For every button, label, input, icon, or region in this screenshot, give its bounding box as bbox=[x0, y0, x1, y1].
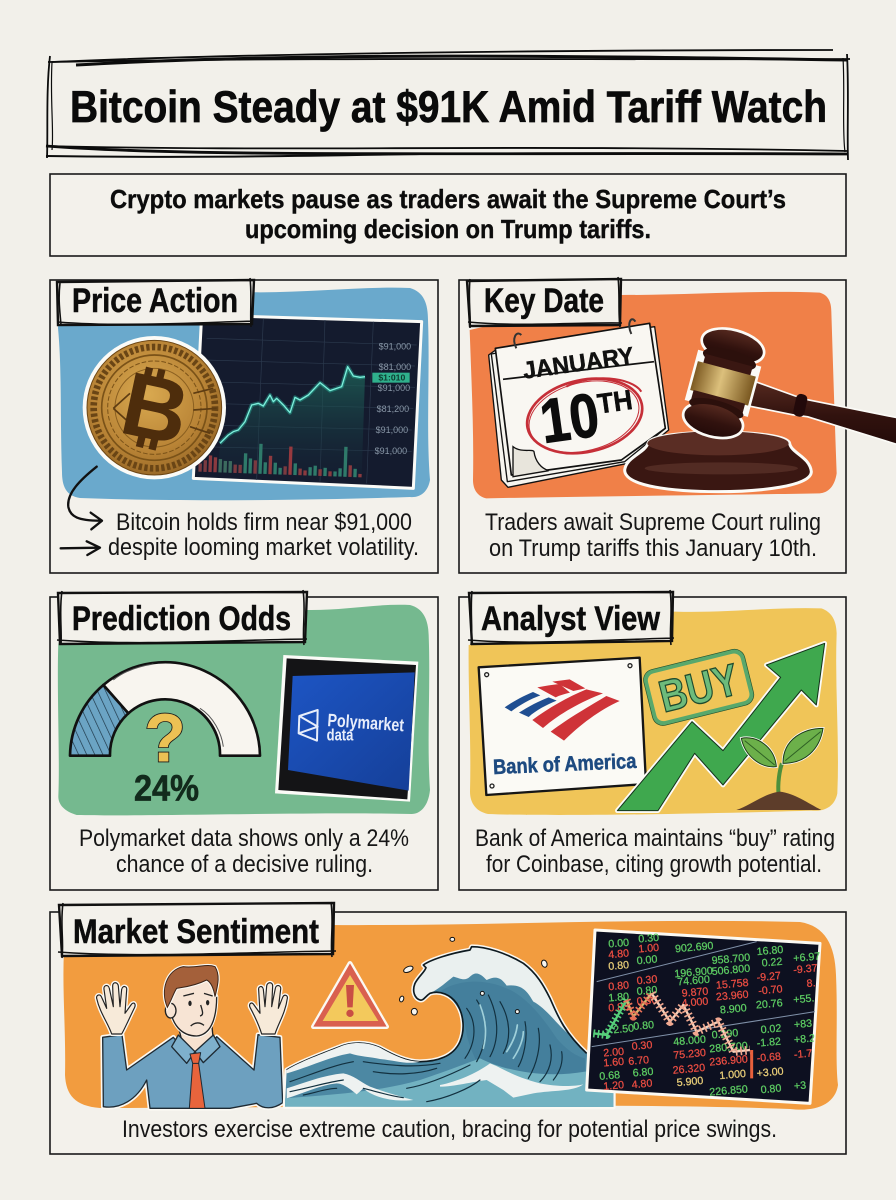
polymarket logo bbox=[299, 710, 318, 741]
heading tab: analyst view: Analyst View bbox=[481, 600, 660, 638]
ticker numbers: 2.50 bbox=[613, 1022, 635, 1036]
investor right hand bbox=[250, 983, 287, 1034]
orange backdrop bbox=[63, 921, 838, 1110]
ticker numbers: 1.60 bbox=[603, 1056, 625, 1070]
ticker numbers: 8.900 bbox=[720, 1002, 747, 1016]
icon: bitcoin coin: B bbox=[113, 354, 197, 465]
ticker numbers: 0.80 bbox=[608, 1001, 630, 1015]
heading tab: analyst view bbox=[468, 590, 674, 645]
ticker numbers: 280.700 bbox=[709, 1040, 748, 1055]
heading tab: price action bbox=[57, 278, 254, 327]
investor shirt bbox=[103, 1035, 283, 1108]
ticker numbers: 75.230 bbox=[673, 1047, 706, 1062]
caption: key date: Traders await Supreme Court ruling bbox=[485, 509, 821, 536]
caption: prediction odds: chance of a decisive ruling. bbox=[116, 851, 373, 878]
ticker numbers: 0.80 bbox=[760, 1082, 782, 1096]
caption: price action bbox=[108, 509, 419, 561]
heading tab: prediction odds bbox=[57, 590, 307, 645]
rising arrow bbox=[617, 643, 825, 811]
ticker numbers: 226.850 bbox=[709, 1083, 748, 1099]
panel: analyst view bbox=[459, 590, 846, 890]
caption: price action: Bitcoin holds firm near $91,000 bbox=[116, 509, 412, 536]
ticker numbers: 2.00 bbox=[603, 1046, 625, 1060]
ticker numbers: -9.37 bbox=[793, 962, 818, 976]
panel: market sentiment bbox=[50, 902, 846, 1154]
investor tie bbox=[189, 1053, 205, 1108]
subtitle box bbox=[50, 174, 846, 256]
prediction artwork bbox=[58, 605, 430, 815]
ticker numbers: 23.960 bbox=[716, 989, 749, 1003]
ticker numbers: -0.68 bbox=[756, 1051, 782, 1065]
ticker numbers: 5.900 bbox=[676, 1075, 704, 1089]
ticker numbers: 0.00 bbox=[636, 953, 658, 967]
ticker numbers: 236.900 bbox=[709, 1053, 748, 1069]
ticker numbers: -0.70 bbox=[758, 983, 783, 997]
wave inner dark face bbox=[440, 982, 585, 1082]
arrow: lower caption arrow bbox=[61, 541, 100, 555]
ticker numbers: 20.76 bbox=[756, 997, 783, 1011]
ticker numbers: 0.80 bbox=[608, 979, 630, 993]
price axis labels: $1:010 bbox=[378, 373, 405, 383]
ticker numbers: 16.80 bbox=[756, 944, 784, 958]
ticker numbers: +83 bbox=[794, 1018, 813, 1031]
price axis labels: $91,000 bbox=[375, 446, 407, 456]
heading tab: key date: Key Date bbox=[484, 282, 604, 320]
ticker numbers: 0.30 bbox=[631, 1039, 653, 1053]
panel frame bbox=[50, 597, 438, 890]
chart area fill bbox=[218, 367, 365, 477]
candlestick trend bbox=[593, 993, 752, 1078]
wave crest outline bbox=[287, 947, 587, 1070]
gavel handle bbox=[748, 382, 896, 443]
caption: prediction odds bbox=[79, 825, 409, 878]
ticker numbers: 0.30 bbox=[636, 973, 658, 987]
panel: price action bbox=[50, 278, 438, 573]
ticker numbers: 6.70 bbox=[628, 1054, 650, 1068]
caption: price action: despite looming market volatility. bbox=[108, 534, 419, 561]
bank name: Bank of America bbox=[493, 750, 637, 779]
ticker numbers: 1.20 bbox=[603, 1079, 625, 1093]
heading tab: key date bbox=[467, 277, 622, 328]
ticker numbers: 4.80 bbox=[631, 1077, 653, 1091]
ticker numbers: 0.22 bbox=[761, 956, 783, 970]
stock ticker screen bbox=[587, 930, 821, 1103]
wave water streaks bbox=[290, 995, 562, 1102]
price axis labels bbox=[372, 341, 411, 456]
wave light base bbox=[285, 1058, 613, 1107]
gavel sound block bbox=[625, 431, 811, 492]
investor head bbox=[169, 980, 217, 1036]
price chart and coin artwork bbox=[61, 315, 422, 555]
price axis labels: $91,000 bbox=[376, 425, 408, 435]
ticker numbers: 9.870 bbox=[681, 986, 709, 1000]
investor face bbox=[183, 993, 213, 1026]
caption: analyst view: Bank of America maintains “buy” rating bbox=[475, 825, 835, 852]
icon: gavel bbox=[625, 324, 896, 492]
ticker numbers: 1.00 bbox=[638, 942, 660, 956]
gauge value: 24% bbox=[134, 768, 199, 809]
heading tab: market sentiment bbox=[58, 902, 336, 958]
caption: analyst view: for Coinbase, citing growth potential. bbox=[486, 851, 822, 878]
ticker numbers: 48.000 bbox=[673, 1034, 706, 1048]
ticker numbers: 4.80 bbox=[608, 947, 630, 961]
seedling bbox=[736, 728, 823, 810]
analyst artwork bbox=[469, 608, 838, 815]
wave body bbox=[285, 947, 613, 1107]
ticker numbers: 0.02 bbox=[760, 1022, 782, 1036]
ticker numbers: 0.30 bbox=[636, 994, 658, 1008]
caption: analyst view bbox=[475, 825, 835, 878]
subtitle line one: Crypto markets pause as traders await the Supreme Court’s bbox=[110, 184, 786, 214]
ticker numbers: 958.700 bbox=[711, 952, 751, 967]
subtitle line two: upcoming decision on Trump tariffs. bbox=[245, 214, 651, 244]
laptop photo bbox=[275, 655, 418, 802]
icon: worried investor bbox=[97, 965, 287, 1108]
ticker numbers: 4.000 bbox=[681, 996, 709, 1010]
volume bars bbox=[198, 442, 363, 477]
caption: market sentiment: Investors exercise extreme caution, bracing for potential price swings. bbox=[122, 1116, 777, 1143]
caption: key date bbox=[485, 509, 821, 562]
ticker numbers bbox=[599, 932, 821, 1099]
ticker numbers: 74.600 bbox=[677, 974, 710, 988]
ticker numbers: 506.800 bbox=[711, 963, 751, 978]
middle foam band bbox=[287, 1073, 413, 1101]
icon: tidal wave bbox=[285, 937, 613, 1107]
heading tab: prediction odds: Prediction Odds bbox=[72, 600, 291, 638]
price axis labels: $91,000 bbox=[378, 383, 410, 393]
price axis labels: $81,000 bbox=[379, 362, 411, 372]
arrow: upper caption arrow bbox=[68, 467, 102, 529]
ticker numbers: 15.758 bbox=[716, 977, 749, 992]
caption: key date: on Trump tariffs this January 10th. bbox=[489, 535, 817, 562]
ticker numbers: -1.82 bbox=[756, 1036, 782, 1050]
buy stamp: BUY bbox=[654, 655, 744, 722]
gauge remaining segment bbox=[103, 662, 260, 756]
calendar month: JANUARY bbox=[521, 342, 636, 385]
gavel head bbox=[680, 324, 766, 443]
ticker divider lines bbox=[592, 942, 815, 1047]
blue backdrop bbox=[58, 288, 430, 500]
investor collar bbox=[172, 1035, 220, 1063]
green backdrop bbox=[58, 605, 430, 815]
ticker numbers: 0.30 bbox=[638, 932, 660, 946]
gauge 24 percent segment bbox=[70, 685, 128, 756]
laptop screen sublabel: data bbox=[327, 726, 354, 745]
ticker numbers: +8.2 bbox=[794, 1032, 816, 1046]
icon: calendar bbox=[489, 319, 669, 487]
ticker numbers: 8. bbox=[806, 977, 816, 990]
ticker numbers: 196.900 bbox=[674, 965, 713, 980]
ticker numbers: 6.80 bbox=[632, 1066, 654, 1080]
wave droplets bbox=[399, 937, 548, 1015]
ticker numbers: 0.00 bbox=[608, 937, 630, 951]
sentiment artwork left bbox=[97, 963, 387, 1108]
price axis labels: $91,000 bbox=[379, 341, 411, 351]
gavel silhouette bbox=[680, 324, 766, 443]
wave highlights bbox=[480, 1005, 523, 1058]
investor hair bbox=[164, 965, 218, 1007]
ticker numbers: 0.68 bbox=[599, 1069, 621, 1083]
ticker numbers: 26.320 bbox=[672, 1062, 706, 1077]
title sketch frame bbox=[46, 50, 850, 160]
key date artwork bbox=[470, 292, 896, 498]
calendar header line bbox=[503, 362, 654, 379]
calendar day: 10 bbox=[536, 381, 603, 457]
laptop screen label: Polymarket bbox=[327, 710, 405, 735]
ticker numbers: 902.690 bbox=[675, 940, 714, 955]
investor left hand bbox=[97, 983, 135, 1034]
icon: question mark: ? bbox=[144, 701, 186, 777]
wave foam crest bbox=[414, 947, 570, 1035]
panel: key date bbox=[459, 277, 896, 573]
chart grid bbox=[198, 318, 417, 483]
ticker numbers: -1.7 bbox=[794, 1048, 813, 1061]
ticker numbers: 1.80 bbox=[608, 991, 630, 1005]
heading tab: price action: Price Action bbox=[72, 282, 238, 320]
binding rings bbox=[514, 319, 635, 348]
yellow backdrop bbox=[469, 608, 838, 815]
icon: warning triangle bbox=[313, 963, 387, 1027]
bank of america sign bbox=[479, 658, 646, 795]
panel: prediction odds bbox=[50, 590, 438, 890]
page curl bbox=[513, 447, 549, 477]
ticker numbers: +3 bbox=[793, 1079, 807, 1093]
ticker numbers: +6.97 bbox=[793, 951, 821, 965]
ticker numbers: -9.27 bbox=[756, 970, 782, 984]
red circle mark bbox=[520, 369, 649, 463]
title bbox=[46, 50, 850, 160]
ticker numbers: +55. bbox=[793, 992, 815, 1006]
upper foam band bbox=[287, 1043, 420, 1073]
ticker numbers: 0.80 bbox=[636, 984, 658, 998]
ticker numbers: +3.00 bbox=[756, 1066, 784, 1080]
panel frame bbox=[459, 597, 846, 890]
gauge chart bbox=[70, 662, 260, 756]
ticker numbers: 0.80 bbox=[608, 959, 630, 973]
ticker numbers: 1.000 bbox=[719, 1068, 747, 1082]
panel frame bbox=[459, 280, 846, 573]
panel frame bbox=[50, 912, 846, 1154]
bank logo stripes bbox=[505, 679, 620, 741]
heading tab: market sentiment: Market Sentiment bbox=[73, 913, 319, 951]
price axis labels: $81,200 bbox=[377, 404, 409, 414]
lower foam crest bbox=[440, 1063, 583, 1098]
price line bbox=[220, 367, 365, 443]
caption: prediction odds: Polymarket data shows only a 24% bbox=[79, 825, 409, 852]
ticker numbers: 0.80 bbox=[633, 1019, 655, 1033]
orange backdrop bbox=[470, 292, 837, 498]
chart screen bbox=[193, 315, 422, 488]
calendar day suffix: TH bbox=[595, 384, 634, 420]
panel frame bbox=[50, 280, 438, 573]
investor neck bbox=[178, 1023, 213, 1053]
ticker numbers: 0.290 bbox=[711, 1027, 739, 1041]
icon: bitcoin coin bbox=[83, 336, 226, 479]
